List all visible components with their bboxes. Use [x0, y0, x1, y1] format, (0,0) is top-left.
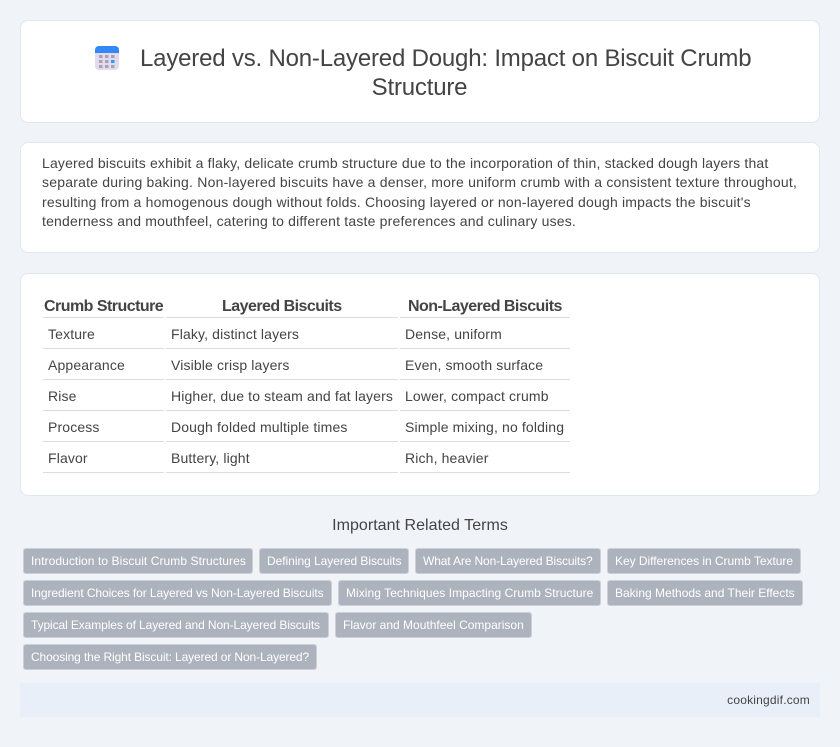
comparison table: Lower, compact crumb: [405, 388, 549, 404]
related terms tags: Introduction to Biscuit Crumb Structures: [31, 554, 246, 568]
footer source: cookingdif.com: [727, 693, 810, 707]
intro paragraph: separate during baking. Non-layered biscuits have a denser, more uniform crumb with a consistent texture throughout,: [42, 174, 797, 190]
related terms tags: Ingredient Choices for Layered vs Non-Layered Biscuits: [31, 586, 324, 600]
related terms tags: [23, 548, 803, 670]
title: Layered vs. Non-Layered Dough: Impact on Biscuit Crumb: [140, 45, 751, 72]
comparison table: Buttery, light: [171, 450, 250, 466]
comparison table: Even, smooth surface: [405, 357, 543, 373]
comparison table: Rich, heavier: [405, 450, 489, 466]
related terms tags: What Are Non-Layered Biscuits?: [423, 554, 593, 568]
intro paragraph: Layered biscuits exhibit a flaky, delicate crumb structure due to the incorporation of thin, stacked dough layers that: [42, 155, 768, 171]
comparison table: Flavor: [48, 450, 88, 466]
intro paragraph: resulting from a homogenous dough without folds. Choosing layered or non-layered dough impacts the biscuit's: [42, 194, 751, 210]
related terms tags: Typical Examples of Layered and Non-Layered Biscuits: [31, 618, 320, 632]
footer bar: [20, 683, 820, 717]
title: [140, 45, 751, 101]
intro text panel: [20, 142, 820, 253]
comparison table: [43, 298, 570, 473]
comparison table: Non-Layered Biscuits: [408, 298, 562, 315]
icon: calendar: [95, 46, 119, 70]
comparison table panel: [20, 273, 820, 496]
related terms tags: Baking Methods and Their Effects: [615, 586, 795, 600]
related terms tags: Defining Layered Biscuits: [267, 554, 401, 568]
comparison table: Rise: [48, 388, 77, 404]
comparison table: Higher, due to steam and fat layers: [171, 388, 393, 404]
comparison table: Simple mixing, no folding: [405, 419, 564, 435]
comparison table: Appearance: [48, 357, 125, 373]
comparison table: Process: [48, 419, 100, 435]
comparison table: Visible crisp layers: [171, 357, 289, 373]
related terms tags: Choosing the Right Biscuit: Layered or Non-Layered?: [31, 650, 309, 664]
related terms tags: Flavor and Mouthfeel Comparison: [343, 618, 524, 632]
comparison table: Texture: [48, 326, 95, 342]
comparison table: Dough folded multiple times: [171, 419, 348, 435]
title: Structure: [372, 74, 467, 101]
intro paragraph: [42, 155, 797, 229]
related terms tags: Key Differences in Crumb Texture: [615, 554, 793, 568]
related terms tags: Mixing Techniques Impacting Crumb Structure: [346, 586, 593, 600]
intro paragraph: tenderness and mouthfeel, catering to different taste preferences and culinary uses.: [42, 213, 576, 229]
comparison table: Dense, uniform: [405, 326, 502, 342]
comparison table: Flaky, distinct layers: [171, 326, 299, 342]
related terms heading: Important Related Terms: [332, 517, 508, 534]
header panel: [20, 20, 820, 123]
comparison table: Crumb Structure: [44, 298, 163, 315]
comparison table: Layered Biscuits: [222, 298, 342, 315]
